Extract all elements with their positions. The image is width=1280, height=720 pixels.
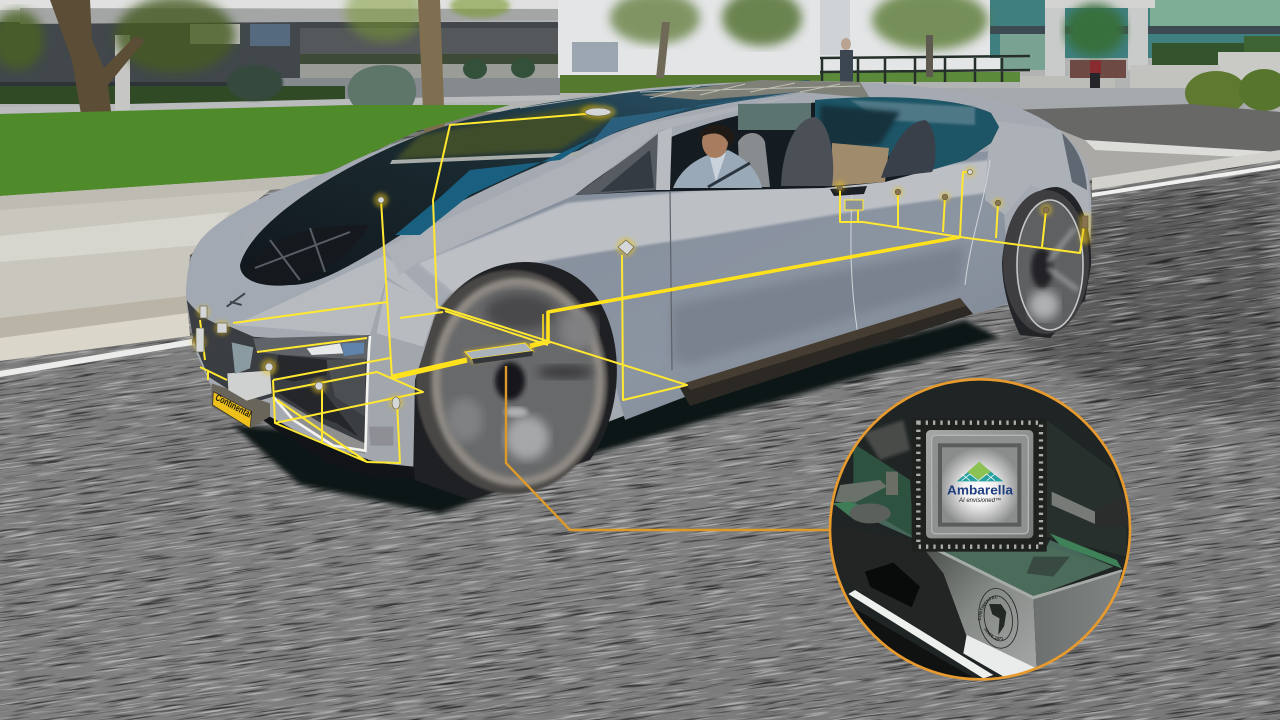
- driver: [673, 124, 762, 188]
- circuit board: [830, 420, 1128, 597]
- ambarella logo: [947, 462, 1014, 504]
- side and roof branches: [381, 113, 687, 400]
- front fascia: [187, 277, 437, 478]
- trees and bushes: [0, 0, 1280, 135]
- pavement and curb, right: [1000, 104, 1280, 197]
- chip package: [912, 418, 1047, 552]
- side windows: [575, 97, 999, 195]
- car shadow on the road: [232, 320, 1000, 514]
- brand badge: [227, 293, 245, 307]
- car body: [186, 81, 1091, 490]
- grass lawn: [0, 105, 510, 196]
- background: buildings: [0, 0, 1280, 115]
- company seal: SINCE 1871: [984, 628, 1004, 640]
- main bus: [393, 237, 960, 377]
- ambarella logo: Ambarella: [947, 483, 1014, 498]
- module housing: [848, 552, 1122, 678]
- orange connector to inset: [506, 366, 830, 530]
- car: [186, 80, 1091, 500]
- sidewalk and curb, left: [0, 174, 325, 377]
- central control unit: [463, 342, 535, 364]
- front wheel: [408, 262, 617, 500]
- company seal: CONTINENTAL: [978, 596, 998, 620]
- rear wheel: [1002, 187, 1091, 338]
- center radar unit: [212, 342, 272, 428]
- fence and pedestrian: [820, 38, 1030, 84]
- hood: [186, 170, 440, 335]
- windshield and glass roof: [240, 80, 870, 286]
- company seal: [978, 588, 1018, 649]
- license plate: Continental: [213, 392, 253, 420]
- sill: [680, 298, 973, 406]
- inset: circular magnified chip: [828, 378, 1132, 681]
- sensor network lines: [200, 113, 1085, 463]
- sensors: [192, 105, 1090, 409]
- inset border: [830, 379, 1130, 679]
- camera module: [369, 427, 393, 446]
- ambarella logo: AI envisioned™: [958, 497, 1001, 504]
- front branches: [200, 302, 423, 463]
- rear sensor branches: [840, 172, 1085, 253]
- door panels: [417, 120, 1090, 420]
